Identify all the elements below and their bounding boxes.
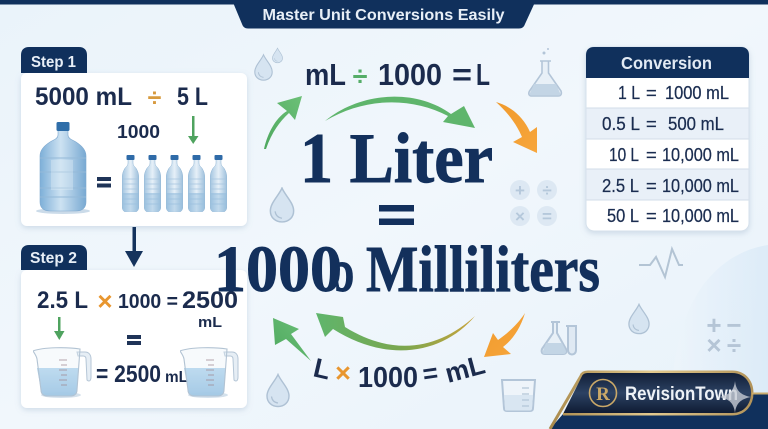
panel: step 1: [21, 47, 247, 226]
icon: plus minus times divide: −: [726, 310, 742, 340]
icon: math symbols circles: +: [515, 181, 525, 200]
equals sign: [379, 205, 414, 225]
row 0.5 L: =: [646, 113, 657, 134]
arrow: green gold curve: [316, 313, 475, 350]
equals: [97, 177, 111, 188]
row 0.5 L: [602, 113, 724, 134]
arrow: step 1 down: [188, 116, 198, 144]
row 2.5 L: 2.5 L: [602, 175, 639, 196]
step 1 tab: Step 1: [31, 54, 76, 71]
arrow: green bottom left: [273, 318, 311, 361]
arrow: orange top right: [496, 102, 537, 153]
row 0.5 L: 0.5 L: [602, 113, 640, 134]
step 1 equation: 5 L: [177, 83, 208, 111]
arrow: green over: [325, 97, 475, 128]
icon: flask and test tube: [542, 322, 577, 354]
formula: mL divide: L: [476, 57, 490, 92]
icon: beaker: [502, 380, 535, 411]
heading: 1 Liter: 1 Liter: [300, 120, 493, 198]
step 2 equation: 2.5 L: [37, 287, 88, 314]
second equation: mL: [165, 369, 188, 386]
row 2.5 L: =: [646, 175, 657, 196]
step 1 equation: ÷: [148, 84, 162, 112]
icon: plus minus times divide: ÷: [727, 330, 741, 360]
table header: Conversion: [621, 53, 712, 73]
formula: L times 1000: 1000: [358, 362, 418, 394]
logo mark: [590, 380, 616, 406]
formula: L times 1000: L: [311, 353, 333, 386]
row 1 L: 1 L: [618, 82, 640, 103]
row 50 L: [607, 205, 739, 226]
heading: 1000 Milliliters: ɔ: [335, 238, 354, 304]
formula: L times 1000: mL: [442, 349, 488, 389]
arrow: step 2 down: [54, 317, 64, 340]
heading: 1000 Milliliters: Milliliters: [366, 233, 600, 306]
table rows shading: [586, 108, 748, 200]
brand name: RevisionTown: [625, 383, 738, 405]
footer navy corner: [550, 394, 768, 429]
formula: mL divide: =: [452, 57, 472, 92]
panel: step 2: [21, 245, 247, 408]
row 1 L: 1000 mL: [665, 82, 729, 103]
row 10 L: 10,000 mL: [662, 144, 739, 165]
arrow: orange bottom right: [484, 313, 525, 357]
row 0.5 L: 500 mL: [668, 113, 724, 134]
icon: math symbols circles: =: [542, 207, 552, 226]
banner title: Master Unit Conversions Easily: [262, 7, 505, 24]
table header: [586, 47, 749, 78]
icon: math symbols circles: ×: [515, 207, 525, 226]
sparkle: [719, 381, 751, 413]
row 50 L: =: [646, 205, 657, 226]
icon: large water jug: [36, 122, 90, 214]
icon: plus minus times divide: +: [706, 310, 722, 340]
step 2 equation: 2500: [182, 287, 238, 314]
arrow: green left up: [264, 96, 302, 149]
step 2 tab: Step 2: [30, 250, 77, 267]
formula: L times 1000: ×: [335, 358, 351, 388]
row 50 L: 10,000 mL: [662, 205, 739, 226]
row 2.5 L: [602, 175, 739, 196]
row 2.5 L: 10,000 mL: [662, 175, 739, 196]
row 10 L: 10 L: [609, 144, 639, 165]
icon: math symbols circles: [510, 180, 557, 226]
icon: right measuring jug: [180, 348, 238, 398]
step 1 equation: 1000: [117, 121, 160, 142]
row 10 L: [609, 144, 739, 165]
formula: mL divide: mL: [305, 57, 346, 92]
row 1 L: [618, 82, 729, 103]
step 2 equation: ×: [97, 286, 113, 316]
step 2 equation: 1000 =: [118, 291, 178, 313]
icon: left measuring jug: [33, 348, 91, 398]
formula: mL divide: [305, 57, 490, 92]
decorative water drops: [255, 48, 649, 407]
step 2 equation: mL: [198, 314, 222, 331]
second equation: = 2500: [96, 361, 161, 388]
heading: 1000 Milliliters: [214, 233, 600, 306]
icon: plus minus times divide: ×: [706, 330, 722, 360]
arrow: step 1 to step 2: [125, 227, 143, 267]
formula: L times 1000: [311, 349, 488, 394]
formula: mL divide: ÷: [353, 61, 368, 91]
row 10 L: =: [646, 144, 657, 165]
step 2 equation: [37, 286, 238, 331]
step 2 tab: [21, 245, 87, 270]
top banner: [0, 0, 768, 28]
icon: pulse line: [639, 249, 683, 277]
panel: conversion table: [586, 47, 749, 231]
step 1 equation: [35, 83, 208, 142]
heading: 1000 Milliliters: 1000: [214, 233, 342, 306]
row 50 L: 50 L: [607, 205, 639, 226]
step 1 tab: [21, 47, 87, 73]
step 1 equation: 5000 mL: [35, 83, 132, 111]
row 1 L: =: [646, 82, 657, 103]
icon: plus minus times divide: [706, 310, 742, 360]
formula: L times 1000: =: [421, 357, 440, 389]
icon: five small bottles: [122, 155, 227, 212]
formula: mL divide: 1000: [378, 57, 442, 92]
equals: [127, 335, 141, 345]
icon: math symbols circles: ÷: [542, 181, 552, 200]
icon: flask: [529, 48, 561, 96]
logo badge: RevisionTown: [550, 372, 768, 429]
logo mark: R: [596, 384, 610, 405]
